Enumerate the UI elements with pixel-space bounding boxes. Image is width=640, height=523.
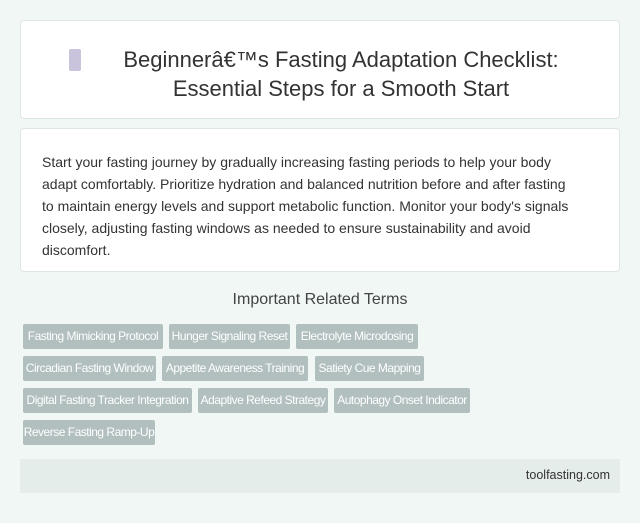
description panel: [20, 128, 620, 272]
tag: [169, 324, 290, 349]
heading: related terms: Important Related Terms: [233, 291, 407, 308]
tag: Electrolyte Microdosing: [301, 329, 413, 343]
tag: [23, 420, 155, 445]
header panel: [20, 20, 620, 119]
tag: Appetite Awareness Training: [166, 361, 304, 375]
tag: [23, 388, 192, 413]
tag: Hunger Signaling Reset: [172, 329, 287, 343]
tag: [198, 388, 328, 413]
description text: Start your fasting journey by gradually increasing fasting periods to help your body adapt comfortably. Prioritize hydration and balanced nutrition before and after fasting to maintain energy levels and support metabolic function. Monitor your body's signals closely, adjusting fasting windows as needed to ensure sustainability and avoid discomfort.: [42, 154, 568, 258]
tag: Reverse Fasting Ramp-Up: [24, 425, 154, 439]
tag: [334, 388, 470, 413]
tag: Adaptive Refeed Strategy: [201, 393, 325, 407]
footer: [20, 459, 620, 493]
tag: [296, 324, 418, 349]
tag: [23, 324, 163, 349]
icon: receipt: [69, 49, 81, 71]
tag: Autophagy Onset Indicator: [337, 393, 467, 407]
tag: Satiety Cue Mapping: [319, 361, 420, 375]
title: Beginnerâ€™s Fasting Adaptation Checklist: Essential Steps for a Smooth Start: [123, 47, 559, 101]
tag: [162, 356, 308, 381]
tag: Fasting Mimicking Protocol: [28, 329, 158, 343]
tag: [315, 356, 424, 381]
tag: [23, 356, 156, 381]
tag: Digital Fasting Tracker Integration: [27, 393, 188, 407]
footer text: toolfasting.com: [526, 468, 610, 482]
tag: Circadian Fasting Window: [26, 361, 153, 375]
